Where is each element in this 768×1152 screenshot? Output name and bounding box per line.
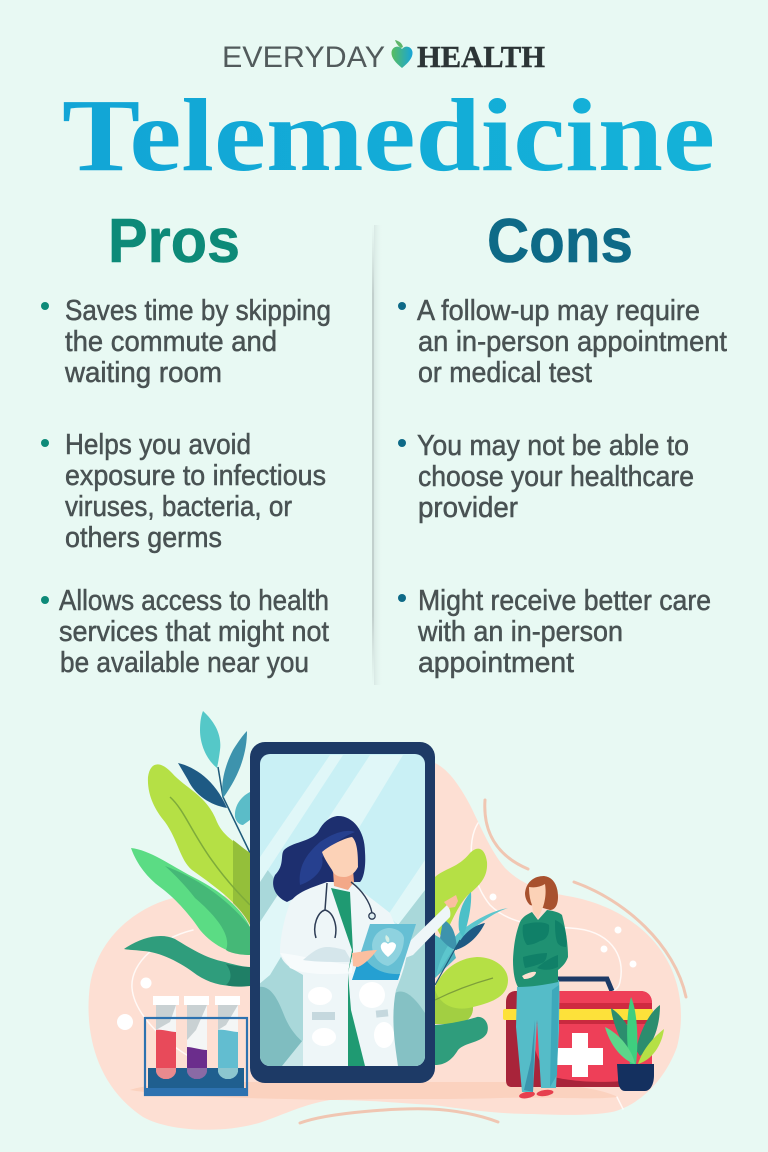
pro item 3: [41, 585, 329, 679]
con item 1: or medical test: [418, 357, 592, 389]
panel: cons: [398, 207, 727, 679]
heading: cons: Cons: [487, 207, 633, 276]
doctor: [273, 816, 407, 1066]
con item 2: You may not be able to: [417, 430, 689, 462]
pro item 2: [41, 429, 326, 554]
title: Telemedicine: [62, 78, 715, 193]
divider between columns: [372, 225, 383, 685]
con item 3: Might receive better care: [418, 585, 711, 617]
pro item 2: Helps you avoid: [65, 429, 251, 461]
heading: pros: Pros: [108, 207, 240, 276]
pro item 2: exposure to infectious: [65, 460, 326, 492]
con item 3: with an in-person: [417, 616, 623, 648]
pro item 3: services that might not: [59, 616, 329, 648]
logo: Everyday Health: EVERYDAY: [222, 41, 385, 74]
right plant leaves: [435, 849, 508, 1065]
tablet with heart: [352, 924, 416, 980]
background blob: [89, 763, 681, 1130]
con item 1: an in-person appointment: [418, 326, 727, 358]
decorative blob lines: [132, 800, 686, 1123]
con item 2: choose your healthcare: [418, 461, 694, 493]
potted plant: [605, 997, 664, 1091]
panel: pros: [41, 207, 331, 679]
phone screen backdrop: [258, 755, 425, 1066]
patient: [513, 876, 568, 1100]
logo: Everyday Health: [222, 39, 545, 74]
pro item 3: be available near you: [60, 647, 309, 679]
doctor arm reaching out: [405, 895, 458, 958]
logo: Everyday Health: HEALTH: [417, 39, 545, 74]
con item 3: appointment: [418, 647, 574, 679]
floor shadow: [130, 1082, 618, 1100]
pro item 3: Allows access to health: [59, 585, 329, 617]
phone with doctor: [250, 742, 458, 1083]
pro item 2: viruses, bacteria, or: [65, 491, 292, 523]
con item 1: [398, 295, 727, 389]
pro item 2: others germs: [65, 522, 222, 554]
con item 2: [398, 430, 694, 524]
illustration: telemedicine scene: [89, 711, 686, 1130]
phone frame: [250, 742, 435, 1083]
pro item 1: [41, 295, 331, 389]
con item 2: provider: [418, 492, 518, 524]
con item 1: A follow-up may require: [417, 295, 700, 327]
pro item 1: Saves time by skipping: [65, 295, 331, 327]
con item 3: [398, 585, 711, 679]
pro item 1: waiting room: [64, 357, 222, 389]
test tube rack: [145, 996, 247, 1095]
left plant leaves: [124, 711, 252, 987]
white cross: [556, 1033, 603, 1077]
pro item 1: the commute and: [65, 326, 277, 358]
first aid kit: [503, 979, 653, 1087]
